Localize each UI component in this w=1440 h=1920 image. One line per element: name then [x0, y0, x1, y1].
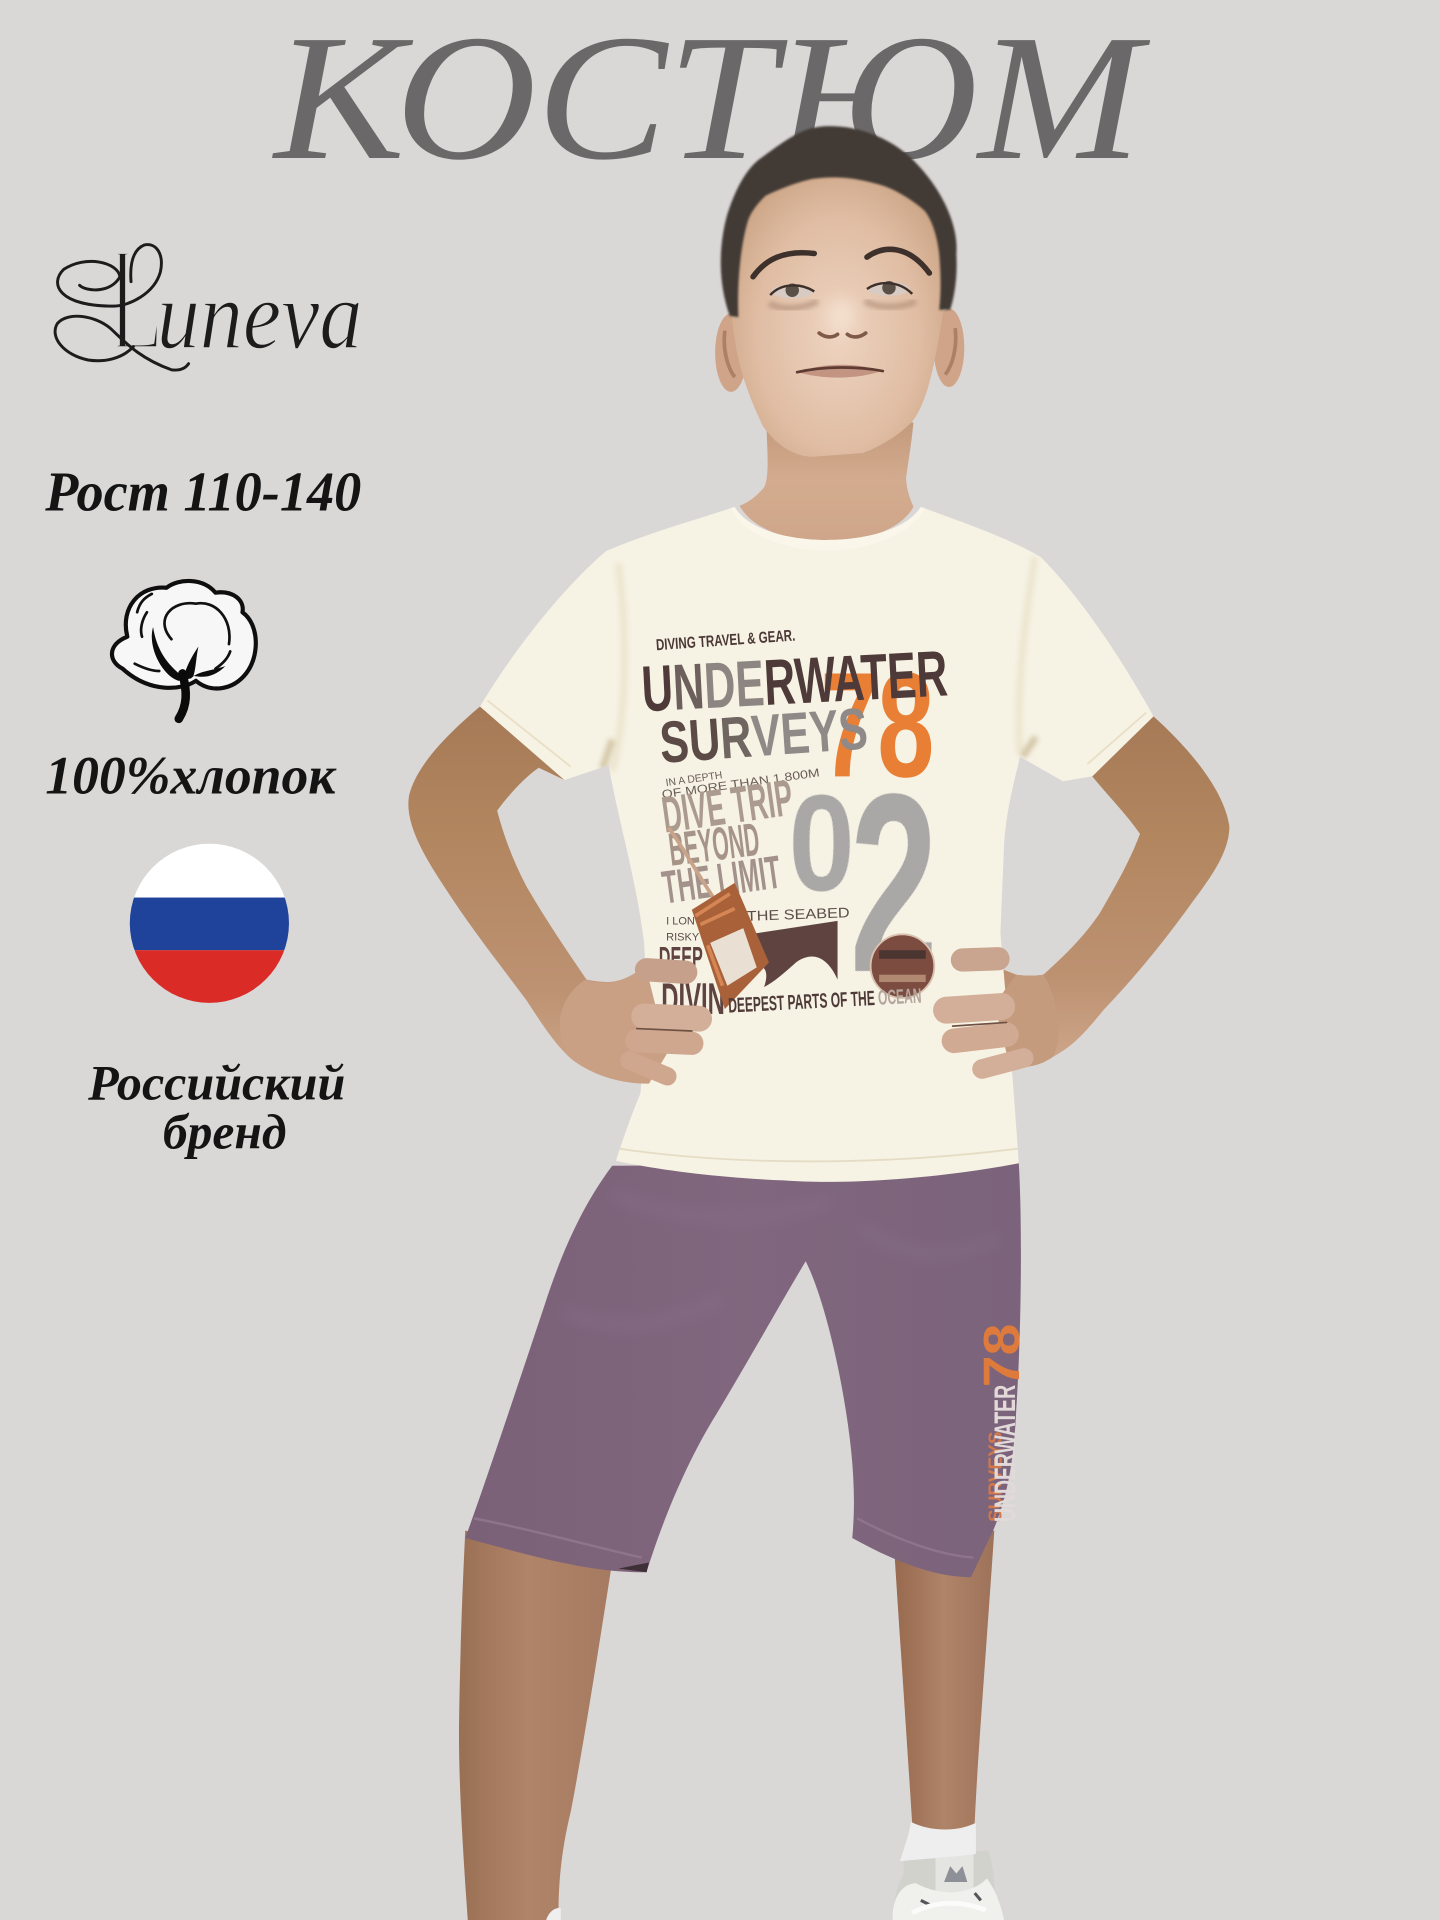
facial features: [753, 249, 929, 378]
eye right: [867, 281, 912, 296]
right arm: [998, 716, 1229, 1068]
right shoe: [893, 1850, 1004, 1920]
t-shirt: [480, 504, 1153, 1182]
height label: Рост 110-140: [44, 462, 361, 524]
print: big 78: 78: [820, 641, 934, 808]
brand origin label: бренд: [163, 1104, 287, 1160]
eye shadows: [769, 301, 916, 308]
print: round badge: [871, 934, 934, 998]
print: big 2: 2: [850, 740, 938, 1025]
title: КОСТЮМ: [271, 0, 1151, 197]
print: UNDERWATER: UNDERWATER: [640, 636, 949, 725]
mouth: [797, 365, 883, 378]
shorts side print: SURVEYS: [985, 1431, 1006, 1522]
print: THE LIMIT: THE LIMIT: [659, 846, 784, 914]
print: depth note: IN A DEPTH: [665, 770, 723, 789]
eye left: [770, 283, 814, 298]
neck: [740, 422, 913, 542]
print: DIVE TRIP: DIVE TRIP: [658, 768, 796, 844]
eyebrow left: [753, 253, 814, 277]
print: SURVEYS: SURVEYS: [658, 696, 870, 776]
print: brown letters: DEEP: [659, 941, 703, 974]
shorts side print: [972, 1324, 1030, 1522]
ears: [715, 309, 964, 392]
left sock remnant: [546, 1908, 561, 1920]
print: DEEPEST PARTS OF THE OCEAN: DEEPEST PARTS OF THE OCEAN: [728, 985, 922, 1018]
brand logo: Luneva: L: [108, 217, 164, 382]
brand logo: Luneva: uneva: [157, 262, 362, 370]
print: DIVING TRAVEL and GEAR: DIVING TRAVEL & GEAR.: [655, 627, 796, 654]
print: brown wave block: [749, 921, 838, 987]
left hand: [560, 965, 699, 1084]
left leg: [459, 1531, 612, 1920]
right hand: [947, 959, 1058, 1069]
icon: russian flag: [122, 844, 296, 1004]
boy figure: [408, 126, 1229, 1920]
left arm: [408, 707, 671, 1084]
right sock: [900, 1822, 976, 1861]
icon: cotton boll: [112, 581, 256, 719]
print: THE SEABED: THE SEABED: [746, 904, 850, 924]
hair: [721, 126, 957, 317]
material label: 100%хлопок: [45, 745, 337, 805]
print: small left notes: [666, 915, 700, 943]
shorts side print: UNDERWATER: [989, 1385, 1022, 1522]
eyebrow right: [867, 249, 929, 273]
print: more than note: OF MORE THAN 1.800M: [661, 766, 821, 801]
print: string of tag: [669, 828, 718, 904]
face: [730, 149, 947, 457]
print: hang tag: [692, 883, 769, 1009]
print: small left notes: RISKY: [666, 931, 700, 943]
print: big 0: 0: [789, 767, 855, 920]
shirt print: [640, 627, 949, 1025]
nose: [819, 299, 866, 337]
right leg: [894, 1531, 994, 1830]
print: small left notes: I LON: [666, 915, 695, 927]
shorts side print: 78: [972, 1324, 1030, 1387]
shorts: [465, 1163, 1030, 1577]
brand origin label: [87, 1055, 345, 1160]
print: brown lower block: DIVIN: [661, 975, 725, 1024]
brand origin label: Российский: [87, 1055, 345, 1111]
shirt print: BEYOND: [666, 813, 762, 876]
brand logo: Luneva: [55, 217, 362, 382]
